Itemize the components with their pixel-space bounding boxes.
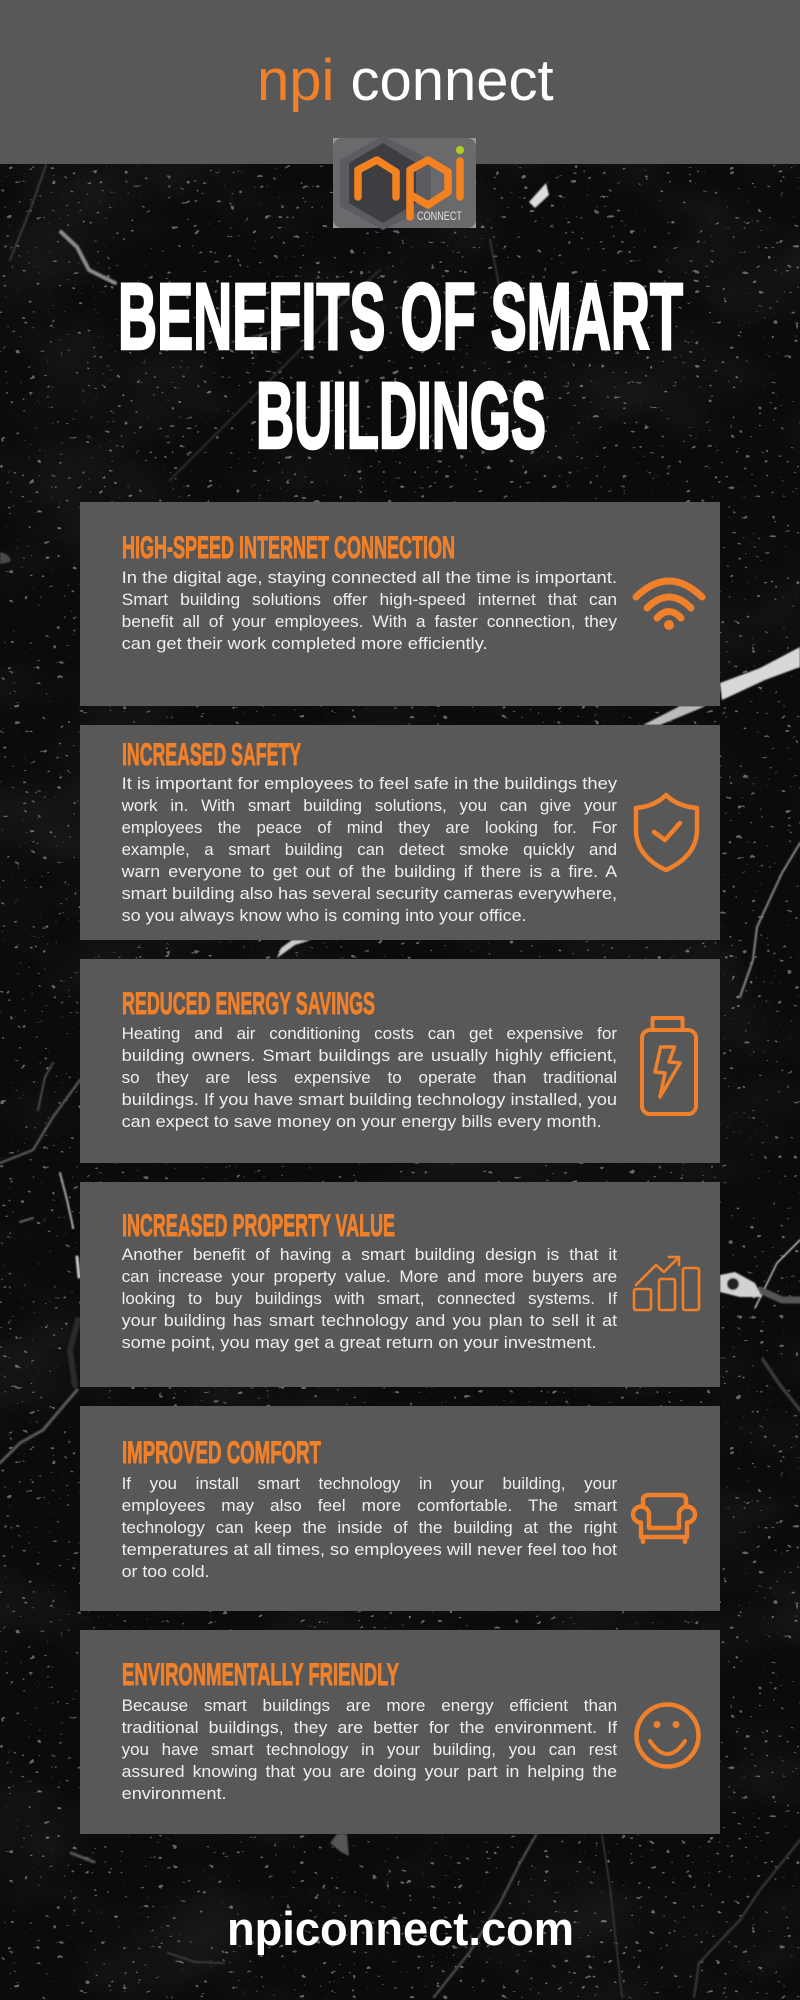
- icon: wifi: [636, 581, 702, 630]
- brand name: npi connect: [257, 48, 554, 113]
- body text: energy: so they are less expensive to operate than traditional: [122, 1068, 617, 1087]
- body text: safety: warn everyone to get out of the building if there is a fire. A: [121, 862, 618, 881]
- panel: improved comfort: [80, 1406, 720, 1611]
- body text: safety: employees the peace of mind they are looking for. For: [122, 818, 617, 837]
- body text: internet: Smart building solutions offer high-speed internet that can: [122, 590, 617, 609]
- logo: CONNECT: [417, 211, 462, 223]
- body text: safety: example, a smart building can detect smoke quickly and: [122, 840, 617, 859]
- logo: [333, 136, 476, 230]
- icon: smiley face: [636, 1704, 698, 1766]
- body text: property value: looking to buy buildings with smart, connected systems. If: [122, 1289, 617, 1308]
- body text: internet: benefit all of your employees. With a faster connection, they: [122, 612, 618, 631]
- body text: safety: work in. With smart building solutions, you can give your: [121, 796, 617, 815]
- body text: comfort: temperatures at all times, so employees will never feel too hot: [122, 1540, 617, 1559]
- body text: internet: In the digital age, staying connected all the time is important.: [122, 568, 617, 587]
- panel: increased property value: [80, 1182, 720, 1387]
- body text: environment: environment.: [122, 1784, 227, 1803]
- heading: environmentally friendly: ENVIRONMENTALLY FRIENDLY: [122, 1656, 399, 1692]
- title: [118, 264, 683, 469]
- footer website: npiconnect.com: [227, 1902, 574, 1955]
- body text: property value: can increase your property value. More and more buyers are: [122, 1267, 617, 1286]
- body text: energy: [122, 1024, 617, 1131]
- body text: internet: can get their work completed more efficiently.: [122, 634, 488, 653]
- body text: comfort: technology can keep the inside of the building at the right: [122, 1518, 617, 1537]
- panel: increased safety: [80, 725, 720, 940]
- body text: internet: [122, 568, 618, 653]
- icon: shield with check: [636, 795, 697, 870]
- body text: comfort: If you install smart technology in your building, your: [122, 1474, 617, 1493]
- body text: safety: smart building also has several security cameras everywhere,: [122, 884, 617, 903]
- body text: property value: your building has smart technology and you plan to sell it at: [122, 1311, 617, 1330]
- body text: environment: Because smart buildings are more energy efficient than: [122, 1696, 617, 1715]
- body text: energy: can expect to save money on your energy bills every month.: [122, 1112, 602, 1131]
- header band: [0, 0, 800, 164]
- body text: comfort: [122, 1474, 617, 1581]
- heading: increased safety: INCREASED SAFETY: [122, 736, 301, 772]
- body text: energy: Heating and air conditioning costs can get expensive for: [122, 1024, 617, 1043]
- panel: high-speed internet connection: [80, 502, 720, 706]
- body text: comfort: employees may also feel more comfortable. The smart: [122, 1496, 617, 1515]
- body text: environment: you have smart technology in your building, you can rest: [122, 1740, 617, 1759]
- body text: energy: building owners. Smart buildings are usually highly efficient,: [122, 1046, 617, 1065]
- body text: environment: traditional buildings, they are better for the environment. If: [122, 1718, 617, 1737]
- heading: high-speed internet connection: HIGH-SPEED INTERNET CONNECTION: [122, 529, 455, 565]
- icon: battery with bolt: [642, 1018, 696, 1114]
- panel: reduced energy savings: [80, 959, 720, 1163]
- body text: safety: [121, 774, 618, 925]
- body text: energy: buildings. If you have smart building technology installed, you: [122, 1090, 617, 1109]
- body text: property value: some point, you may get a great return on your investment.: [122, 1333, 597, 1352]
- panel: environmentally friendly: [80, 1630, 720, 1834]
- body text: safety: so you always know who is coming into your office.: [122, 906, 527, 925]
- body text: property value: [122, 1245, 617, 1352]
- body text: comfort: or too cold.: [122, 1562, 210, 1581]
- body text: environment: [122, 1696, 617, 1803]
- title: BUILDINGS: [256, 363, 546, 469]
- icon: armchair: [633, 1495, 695, 1542]
- heading: improved comfort: IMPROVED COMFORT: [122, 1434, 321, 1470]
- heading: reduced energy savings: REDUCED ENERGY SAVINGS: [122, 985, 375, 1021]
- body text: environment: assured knowing that you are doing your part in helping the: [122, 1762, 617, 1781]
- icon: rising bar chart: [634, 1257, 699, 1310]
- body text: safety: It is important for employees to feel safe in the buildings they: [122, 774, 618, 793]
- body text: property value: Another benefit of having a smart building design is that it: [122, 1245, 617, 1264]
- heading: increased property value: INCREASED PROPERTY VALUE: [122, 1207, 395, 1243]
